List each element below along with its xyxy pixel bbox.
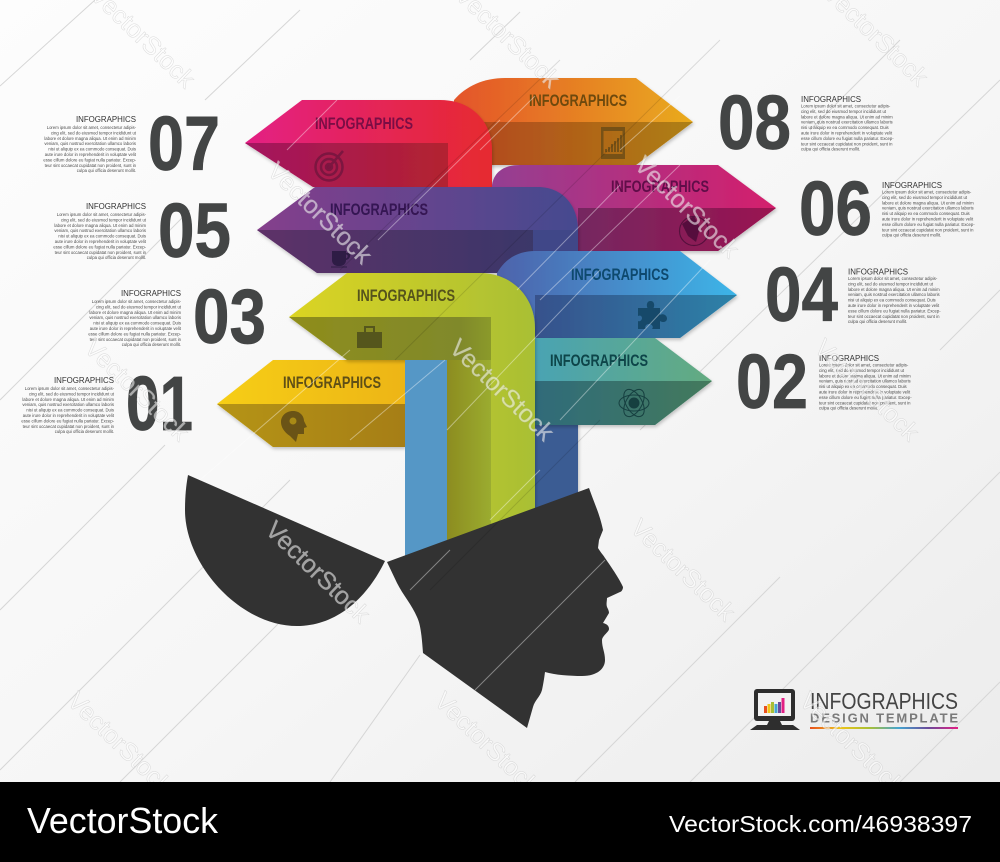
number 05: 05 — [158, 188, 231, 274]
icon: monitor — [750, 689, 800, 730]
text block 07: nisi ut aliquip ex ea commodo consequat. Duis — [48, 147, 136, 152]
logo subtitle: DESIGN TEMPLATE — [810, 710, 958, 726]
text block 08: nisi ut aliquip ex ea commodo consequat. Duis — [801, 125, 889, 130]
text block 07: veniam, quis nostrud exercitation ullamco laboris — [44, 141, 136, 146]
text block 02: INFOGRAPHICS — [819, 354, 879, 363]
text block 08: veniam, quis nostrud exercitation ullamco laboris — [801, 120, 893, 125]
text block 08: Lorem ipsum dolor sit amet, consectetur adipis- — [801, 104, 891, 108]
text block 05: INFOGRAPHICS — [86, 202, 146, 211]
icon: target — [316, 151, 343, 180]
text block 01: culpa qui officia deserunt mollit. — [55, 429, 114, 434]
text block 05: culpa qui officia deserunt mollit. — [87, 255, 146, 260]
text block 04: nisi ut aliquip ex ea commodo consequat. Duis — [848, 298, 936, 303]
number 03: 03 — [193, 274, 266, 360]
text block 06: teur sint occaecat cupidatat non proident, sunt in — [882, 227, 974, 232]
arrow 08 — [454, 78, 693, 165]
arrow 06 — [492, 165, 776, 251]
accent: red sliver — [405, 360, 410, 377]
text block 04: veniam, quis nostrud exercitation ullamco laboris — [848, 292, 940, 297]
watermark text: VectorStock — [794, 687, 910, 800]
logo: infographics design template — [750, 688, 958, 730]
number 07: 07 — [148, 101, 220, 187]
icon: atom — [619, 386, 649, 420]
text block 08: INFOGRAPHICS — [801, 95, 861, 104]
blue column — [405, 360, 447, 560]
text block 03 — [88, 289, 182, 347]
head silhouette — [185, 475, 623, 728]
text block 03: aute irure dolor in reprehenderit in voluptate velit — [90, 326, 182, 331]
text block 08: labore et dolore magna aliqua. Ut enim ad minim — [801, 114, 893, 119]
text block 08: esse cillum dolore eu fugiat nulla pariatur. Excep- — [801, 136, 894, 141]
text block 02: cing elit, sed do eiusmod tempor incididunt ut — [819, 368, 905, 373]
watermark lines over artwork — [200, 96, 710, 690]
text block 08 — [801, 95, 894, 152]
text block 04: culpa qui officia deserunt mollit. — [848, 319, 907, 324]
text block 03: teur sint occaecat cupidatat non proident, sunt in — [90, 337, 182, 342]
label: infographics 05: INFOGRAPHICS — [330, 201, 428, 219]
icon: briefcase — [357, 326, 382, 348]
watermark text: VectorStock — [444, 334, 560, 447]
text block 01: cing elit, sed do eiusmod tempor incididunt ut — [29, 391, 115, 396]
text block 01 — [21, 376, 115, 434]
text block 05: veniam, quis nostrud exercitation ullamco laboris — [54, 228, 146, 233]
text block 04: labore et dolore magna aliqua. Ut enim ad minim — [848, 287, 940, 292]
number 02: 02 — [736, 339, 808, 425]
face profile — [387, 488, 623, 728]
number 06: 06 — [799, 166, 872, 252]
text block 03: Lorem ipsum dolor sit amet, consectetur adipis- — [92, 299, 182, 304]
text block 07: esse cillum dolore eu fugiat nulla pariatur. Excep- — [43, 157, 137, 162]
text block 04: aute irure dolor in reprehenderit in voluptate velit — [848, 303, 940, 308]
text block 06: nisi ut aliquip ex ea commodo consequat. Duis — [882, 211, 970, 216]
text block 05: nisi ut aliquip ex ea commodo consequat. Duis — [58, 234, 146, 239]
text block 07: culpa qui officia deserunt mollit. — [77, 168, 136, 173]
text block 03: nisi ut aliquip ex ea commodo consequat. Duis — [93, 321, 181, 326]
text block 04: INFOGRAPHICS — [848, 268, 908, 276]
text block 03: esse cillum dolore eu fugiat nulla pariatur. Excep- — [88, 331, 182, 336]
watermark text: VectorStock — [629, 151, 745, 264]
footer bar — [0, 782, 1000, 862]
footer brand: VectorStock — [27, 800, 219, 841]
text block 06 — [882, 181, 975, 238]
text block 04: cing elit, sed do eiusmod tempor incididunt ut — [848, 281, 934, 286]
text block 01: veniam, quis nostrud exercitation ullamco laboris — [22, 402, 114, 407]
text block 01: Lorem ipsum dolor sit amet, consectetur adipis- — [25, 386, 115, 391]
text block 07: teur sint occaecat cupidatat non proident, sunt in — [45, 163, 137, 168]
label: infographics 02: INFOGRAPHICS — [550, 352, 648, 370]
watermark text: VectorStock — [79, 334, 195, 447]
arrow 02 — [535, 338, 712, 425]
text block 02: culpa qui officia deserunt mollit. — [819, 406, 878, 411]
text block 06: aute irure dolor in reprehenderit in voluptate velit — [882, 216, 974, 222]
skull flap — [185, 475, 385, 626]
text block 06: labore et dolore magna aliqua. Ut enim ad minim — [882, 200, 974, 205]
text block 03: cing elit, sed do eiusmod tempor incididunt ut — [96, 304, 182, 309]
text block 04 — [848, 268, 941, 324]
text block 03: veniam, quis nostrud exercitation ullamco laboris — [89, 315, 181, 320]
text block 01: labore et dolore magna aliqua. Ut enim ad minim — [22, 397, 114, 402]
text block 05: cing elit, sed do eiusmod tempor incididunt ut — [61, 217, 147, 222]
arrow 07 — [245, 100, 492, 187]
text block 04: esse cillum dolore eu fugiat nulla pariatur. Excep- — [848, 308, 941, 313]
text block 05: esse cillum dolore eu fugiat nulla pariatur. Excep- — [53, 244, 147, 249]
text block 02 — [819, 354, 912, 411]
text block 02: Lorem ipsum dolor sit amet, consectetur adipis- — [819, 362, 909, 368]
footer image id: VectorStock.com/46938397 — [669, 811, 972, 837]
text block 07: INFOGRAPHICS — [76, 115, 136, 124]
text block 03: INFOGRAPHICS — [121, 289, 181, 298]
label: infographics 07: INFOGRAPHICS — [315, 115, 413, 133]
text block 07 — [43, 115, 137, 173]
arrow 01 — [217, 360, 405, 447]
logo title: INFOGRAPHICS — [810, 688, 958, 714]
text block 05: labore et dolore magna aliqua. Ut enim ad minim — [54, 223, 146, 228]
text block 05: aute irure dolor in reprehenderit in voluptate velit — [55, 239, 147, 244]
label: infographics 03: INFOGRAPHICS — [357, 287, 455, 305]
number 08: 08 — [718, 80, 791, 166]
text block 06: culpa qui officia deserunt mollit. — [882, 233, 941, 238]
icon: tablet chart — [601, 127, 625, 159]
text block 06: veniam, quis nostrud exercitation ullamco laboris — [882, 206, 974, 211]
text block 05: Lorem ipsum dolor sit amet, consectetur adipis- — [57, 212, 147, 217]
watermark text: VectorStock — [809, 334, 925, 447]
text block 07: aute irure dolor in reprehenderit in voluptate velit — [45, 152, 137, 157]
arrow 03 — [289, 273, 535, 545]
text block 01: nisi ut aliquip ex ea commodo consequat. Duis — [26, 408, 114, 413]
text block 01: teur sint occaecat cupidatat non proident, sunt in — [23, 424, 115, 429]
label: infographics 01: INFOGRAPHICS — [283, 374, 381, 392]
label: infographics 06: INFOGRAPHICS — [611, 178, 709, 196]
text block 02: veniam, quis nostrud exercitation ullamco laboris — [819, 379, 911, 384]
watermark text: VectorStock — [62, 687, 178, 800]
text block 07: Lorem ipsum dolor sit amet, consectetur adipis- — [47, 125, 137, 130]
text block 01: esse cillum dolore eu fugiat nulla pariatur. Excep- — [21, 418, 115, 423]
text block 01: aute irure dolor in reprehenderit in voluptate velit — [23, 413, 115, 418]
text block 02: nisi ut aliquip ex ea commodo consequat. Duis — [819, 384, 907, 389]
number 01: 01 — [126, 361, 193, 447]
text block 05: teur sint occaecat cupidatat non proident, sunt in — [55, 250, 147, 255]
arrow 05 — [257, 187, 578, 273]
text block 06: Lorem ipsum dolor sit amet, consectetur adipis- — [882, 190, 972, 194]
number 04: 04 — [765, 252, 838, 338]
text block 06: cing elit, sed do eiusmod tempor incididunt ut — [882, 195, 968, 200]
text block 06: INFOGRAPHICS — [882, 181, 942, 190]
text block 07: cing elit, sed do eiusmod tempor incididunt ut — [51, 130, 137, 135]
text block 03: culpa qui officia deserunt mollit. — [122, 342, 181, 347]
text block 02: esse cillum dolore eu fugiat nulla pariatur. Excep- — [819, 395, 912, 400]
text block 03: labore et dolore magna aliqua. Ut enim ad minim — [89, 310, 181, 315]
text block 02: teur sint occaecat cupidatat non proident, sunt in — [819, 400, 911, 405]
text block 04: teur sint occaecat cupidatat non proident, sunt in — [848, 314, 940, 319]
text block 08: teur sint occaecat cupidatat non proident, sunt in — [801, 141, 893, 146]
label: infographics 04: INFOGRAPHICS — [571, 266, 669, 284]
text block 04: Lorem ipsum dolor sit amet, consectetur adipis- — [848, 276, 938, 281]
watermark text: VectorStock — [429, 687, 545, 800]
text block 05 — [53, 202, 147, 260]
text block 07: labore et dolore magna aliqua. Ut enim ad minim — [44, 136, 136, 141]
arrow 04 with rear column — [497, 251, 737, 515]
icon: globe — [680, 216, 708, 246]
text block 08: aute irure dolor in reprehenderit in voluptate velit — [801, 130, 893, 136]
watermark text: VectorStock — [262, 157, 378, 270]
text block 08: cing elit, sed do eiusmod tempor incididunt ut — [801, 109, 887, 114]
text block 08: culpa qui officia deserunt mollit. — [801, 147, 860, 152]
icon: cup — [331, 251, 350, 268]
icon: puzzle — [638, 301, 667, 329]
label: infographics 08: INFOGRAPHICS — [529, 92, 627, 110]
icon: head with bulb — [281, 411, 307, 442]
watermark text: VectorStock — [625, 514, 741, 627]
text block 02: aute irure dolor in reprehenderit in voluptate velit — [819, 390, 911, 394]
text block 02: labore et dolore magna aliqua. Ut enim ad minim — [819, 373, 911, 378]
watermark text: VectorStock — [260, 516, 376, 629]
rainbow line — [810, 727, 958, 729]
text block 01: INFOGRAPHICS — [54, 376, 114, 385]
text block 06: esse cillum dolore eu fugiat nulla pariatur. Excep- — [882, 222, 975, 227]
